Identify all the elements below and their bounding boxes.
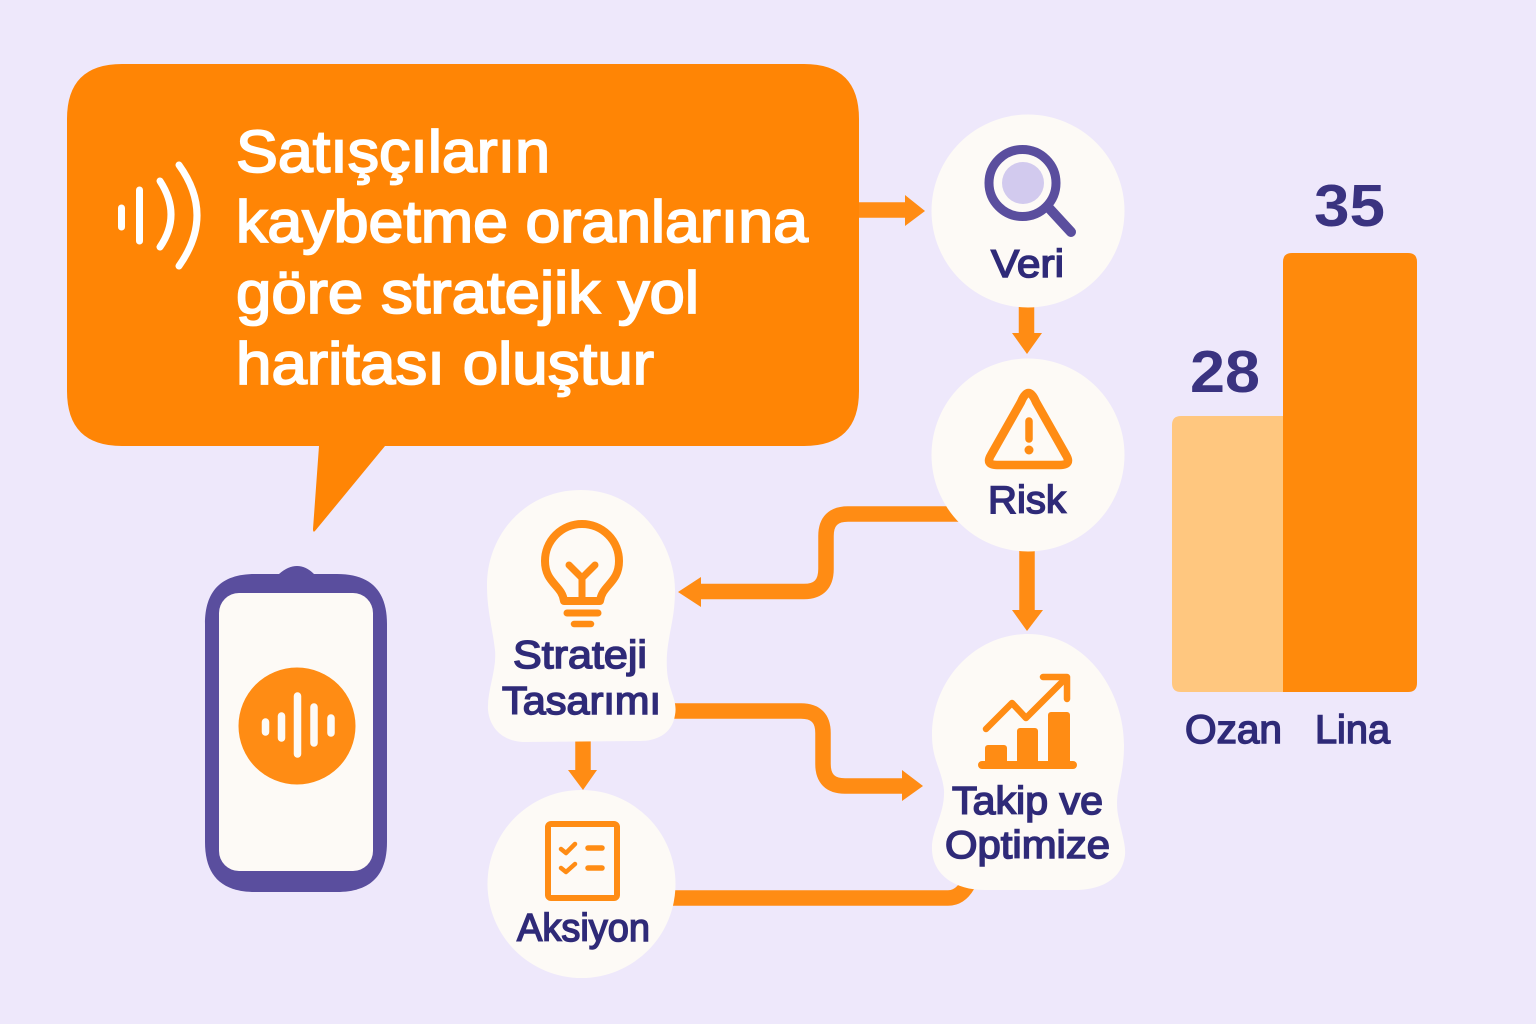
bar: Lina [1283,253,1417,692]
icon: magnifying glass [989,150,1071,232]
label: Takip ve Optimize [945,780,1110,867]
arrow: Veri to Risk [1012,305,1042,354]
label: Takip ve Optimize: Optimize [945,824,1110,867]
category: Ozan: Ozan [1185,708,1282,752]
title text [236,119,808,397]
connector: Aksiyon to Takip ve Optimize [670,880,970,898]
icon: checklist [548,824,617,898]
icon: voice circle [238,668,356,784]
arrow: Risk to Takip ve Optimize [1012,548,1043,631]
label: Takip ve Optimize: Takip ve [952,780,1103,823]
arrow: Strateji Tasarımı to Aksiyon [568,738,597,790]
label: Strateji Tasarımı: Tasarımı [502,680,661,723]
icon: light bulb [545,524,619,624]
label: Aksiyon: Aksiyon [517,907,650,950]
title text: kaybetme oranlarına [236,189,808,255]
label: Veri: Veri [991,243,1064,286]
node: Veri [932,114,1124,308]
title text: haritası oluştur [236,331,654,397]
node: Risk [932,358,1124,552]
arrow: Risk to Strateji Tasarımı [678,514,960,607]
title text: Satışçıların [236,119,550,185]
speech bubble [67,64,859,532]
phone with voice icon [205,566,387,892]
arrow: Strateji Tasarımı to Takip ve Optimize [670,711,923,801]
label: Strateji Tasarımı [502,634,661,723]
label: Risk: Risk [988,479,1066,522]
icon: warning triangle [989,393,1068,465]
arrow: speech bubble to Veri [855,195,925,226]
bar: Ozan [1172,416,1284,692]
node: Aksiyon [488,790,676,978]
value: 28: 28 [1190,339,1260,405]
icon: sound waves [122,165,197,266]
node: Strateji Tasarımı [487,490,676,742]
bar chart [1172,173,1417,752]
value: 35: 35 [1314,173,1385,239]
category: Lina: Lina [1315,708,1391,752]
icon: growth chart [978,677,1077,769]
title text: göre stratejik yol [236,260,699,326]
label: Strateji Tasarımı: Strateji [513,634,647,677]
node: Takip ve Optimize [932,634,1125,890]
